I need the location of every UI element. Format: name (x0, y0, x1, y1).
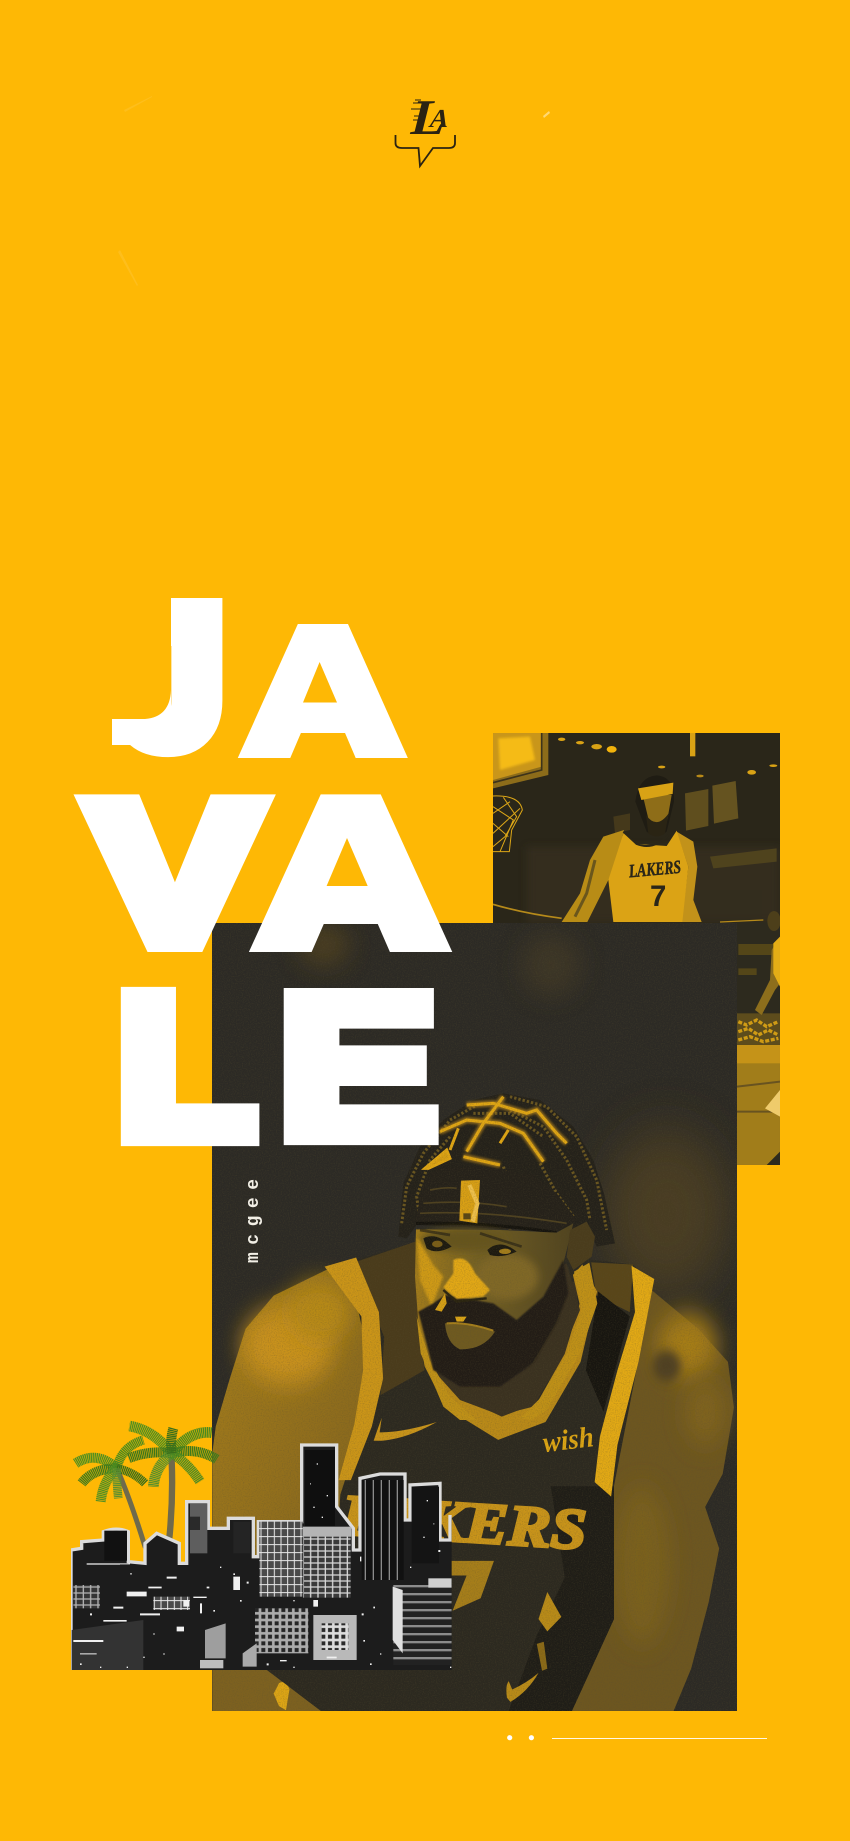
viewer-left arm (212, 1270, 379, 1711)
window speckles (73, 1463, 451, 1668)
palm trunks (118, 1460, 172, 1547)
letter V: V (90, 762, 259, 985)
arena lights and banners (493, 733, 780, 923)
hair (398, 1093, 615, 1247)
nose (443, 1258, 490, 1299)
ear (567, 1222, 595, 1270)
letter L: L (117, 954, 255, 1179)
lens glows (298, 923, 581, 997)
hair parting glow (440, 1097, 567, 1165)
neck (420, 1263, 580, 1415)
collar highlight (531, 1262, 598, 1408)
small player head (635, 775, 674, 836)
team logo (396, 90, 455, 166)
upper left towers (190, 1503, 207, 1553)
lips (445, 1323, 495, 1349)
lower grid buildings (255, 1608, 308, 1653)
lower strip: crowd, floor and second player (737, 911, 781, 1165)
striped tower (362, 1480, 404, 1580)
jersey straps and collar (325, 1257, 654, 1497)
logo speech bracket (396, 135, 455, 166)
jersey text: LAKERS (627, 857, 682, 882)
left grid building (259, 1522, 303, 1597)
poster (71, 96, 780, 1740)
logo LA letters: L (406, 90, 453, 145)
jersey number (451, 1561, 494, 1611)
letter A, first line: A (248, 597, 398, 786)
cheek and moustache glints (435, 1293, 447, 1312)
centre grid building (303, 1536, 351, 1598)
arms (562, 830, 624, 922)
dots (507, 1735, 512, 1740)
team logo: A (427, 103, 453, 133)
letter E: E (278, 953, 437, 1179)
lower right office (393, 1585, 452, 1665)
line (552, 1738, 767, 1739)
headband (415, 1167, 577, 1233)
tall tower (305, 1450, 335, 1526)
photo grain (212, 923, 737, 1711)
head (398, 1093, 615, 1420)
surname vertical text: mcgee (244, 1171, 264, 1263)
photo: main player portrait (212, 923, 737, 1711)
backboard (493, 733, 548, 788)
palm trees (76, 1426, 217, 1547)
beard (418, 1260, 568, 1387)
city skyline collage (71, 1445, 457, 1677)
right palm fronds (128, 1426, 217, 1487)
NBA logo on shorts (274, 1682, 289, 1710)
wrist marks and lower swoosh (506, 1592, 561, 1702)
jersey torso (267, 1241, 653, 1711)
jersey (608, 831, 688, 922)
skyline silhouette (71, 1445, 457, 1677)
braids (402, 1097, 607, 1230)
letter A, second line: A (260, 761, 441, 984)
background scratches (118, 96, 550, 286)
small player body (562, 830, 702, 922)
basketball net (493, 796, 522, 852)
jersey wish logo: wish (541, 1420, 595, 1459)
viewer-right arm (572, 1289, 734, 1711)
jersey LAKERS lettering: LAKERS (339, 1482, 588, 1562)
small player body: 7 (650, 880, 666, 913)
eyes (423, 1236, 452, 1251)
letter J: J (122, 571, 222, 783)
hair parting lines (425, 1097, 567, 1168)
pagination dots and line (507, 1735, 767, 1740)
photo: player in arena, top right (493, 733, 781, 1165)
background haze (603, 1130, 730, 1296)
name heading (90, 571, 441, 1179)
face (415, 1222, 595, 1387)
NBA logo (459, 1180, 480, 1223)
jersey swoosh (374, 1418, 437, 1441)
left palm fronds (76, 1440, 145, 1502)
right dark tower (412, 1487, 439, 1563)
